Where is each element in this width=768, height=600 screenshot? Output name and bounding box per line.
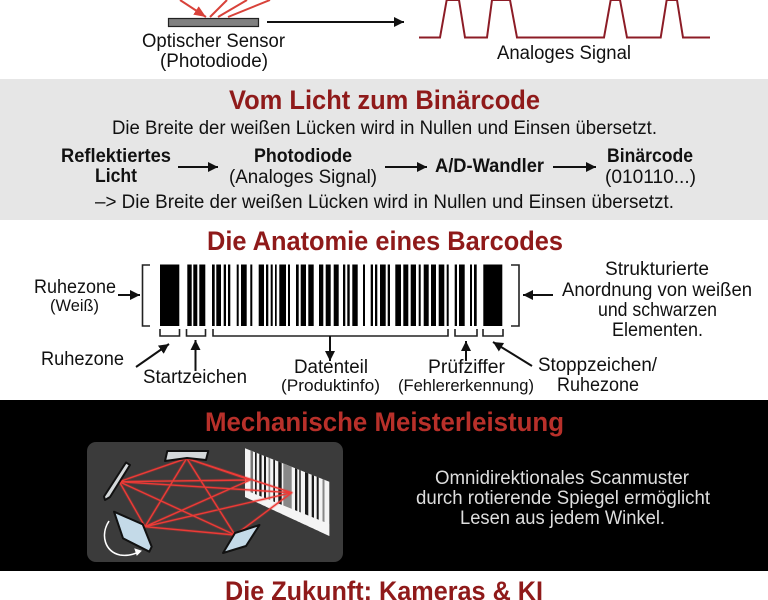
mirror: top — [165, 451, 208, 461]
step: photodiode — [229, 146, 377, 188]
panel: barcode anatomy — [0, 220, 768, 400]
arrow: quiet zone — [136, 344, 169, 367]
label: analog signal: Analoges Signal — [497, 43, 631, 64]
text: omnidirectional scanning — [416, 468, 711, 529]
label: optical sensor — [142, 31, 286, 72]
step: reflected light: Reflektiertes — [61, 146, 171, 167]
label: stop character — [538, 355, 658, 396]
text: omnidirectional scanning: durch rotierende Spiegel ermöglicht — [416, 488, 711, 509]
text: omnidirectional scanning: Omnidirektionales Scanmuster — [435, 468, 690, 489]
heading: barcode anatomy: Die Anatomie eines Barcodes — [207, 226, 563, 256]
bracket: left quiet zone — [142, 265, 150, 326]
step: A/D converter: A/D-Wandler — [435, 156, 545, 177]
text: structure note — [562, 259, 752, 341]
bracket: right quiet zone — [511, 265, 519, 326]
barcode on surface — [245, 448, 330, 536]
illustration: rotating mirror scanner — [87, 442, 343, 572]
label: data part: Datenteil — [294, 357, 368, 378]
text: structure note: Strukturierte — [605, 259, 709, 280]
mirror: left — [104, 462, 130, 500]
label: quiet zone left: Ruhezone — [34, 277, 116, 298]
label: stop character: Stoppzeichen/ — [538, 355, 658, 376]
laser beams — [119, 458, 292, 535]
step: photodiode: (Analoges Signal) — [229, 167, 377, 188]
label: start character: Startzeichen — [143, 367, 247, 388]
panel: mechanical masterpiece — [0, 400, 768, 572]
label: data part — [281, 357, 380, 395]
label: check digit: (Fehlererkennung) — [398, 377, 534, 395]
arrow: sensor to signal — [267, 21, 404, 23]
step: reflected light: Licht — [95, 166, 138, 187]
mirror: lower right — [223, 525, 260, 553]
mirror: lower left — [114, 512, 152, 552]
text: structure note: und schwarzen — [598, 300, 717, 321]
label: data part: (Produktinfo) — [281, 377, 380, 395]
step: photodiode: Photodiode — [254, 146, 352, 167]
icon: reflected light rays — [180, 0, 270, 17]
step: reflected light — [61, 146, 171, 187]
arrow: structure note — [523, 294, 553, 296]
panel: sensor and analog signal — [0, 0, 768, 79]
heading: from light to binary code: Vom Licht zum Binärcode — [229, 85, 540, 115]
brackets: barcode parts — [160, 329, 503, 336]
chart: analog signal waveform — [419, 0, 710, 38]
label: quiet zone: Ruhezone — [41, 349, 124, 370]
panel: the future — [0, 571, 768, 600]
label: quiet zone left: (Weiß) — [50, 297, 99, 315]
arrow: light to photodiode — [178, 166, 218, 168]
arrow: stop character — [493, 342, 532, 366]
label: optical sensor: (Photodiode) — [160, 51, 268, 72]
text: conclusion: –> Die Breite der weißen Lücken wird in Nullen und Einsen übersetzt. — [95, 192, 674, 213]
arrow: converter to binary code — [553, 166, 596, 168]
label: optical sensor: Optischer Sensor — [142, 31, 286, 52]
arrow: start character — [194, 340, 196, 371]
step: binary code: Binärcode — [607, 146, 693, 167]
arrow: photodiode to converter — [385, 166, 427, 168]
barcode bottom margin — [245, 490, 329, 536]
text: structure note: Anordnung von weißen — [562, 280, 752, 301]
panel: from light to binary code — [0, 79, 768, 220]
label: check digit — [398, 357, 534, 395]
text: structure note: Elementen. — [612, 320, 703, 341]
step: binary code — [605, 146, 696, 188]
step: binary code: (010110...) — [605, 167, 696, 188]
heading: mechanical masterpiece: Mechanische Meisterleistung — [205, 407, 564, 437]
text: subtitle: Die Breite der weißen Lücken wird in Nullen und Einsen übersetzt. — [112, 118, 657, 139]
barcode — [160, 264, 502, 326]
icon: optical sensor — [168, 18, 258, 26]
arrow: quiet zone left — [118, 294, 140, 296]
label: check digit: Prüfziffer — [428, 357, 506, 378]
arrow: data part — [329, 336, 331, 361]
arrow: check digit — [465, 341, 467, 361]
label: stop character: Ruhezone — [557, 375, 639, 396]
label: quiet zone left — [34, 277, 116, 315]
arrow: rotation — [105, 521, 140, 555]
text: omnidirectional scanning: Lesen aus jedem Winkel. — [460, 508, 665, 529]
